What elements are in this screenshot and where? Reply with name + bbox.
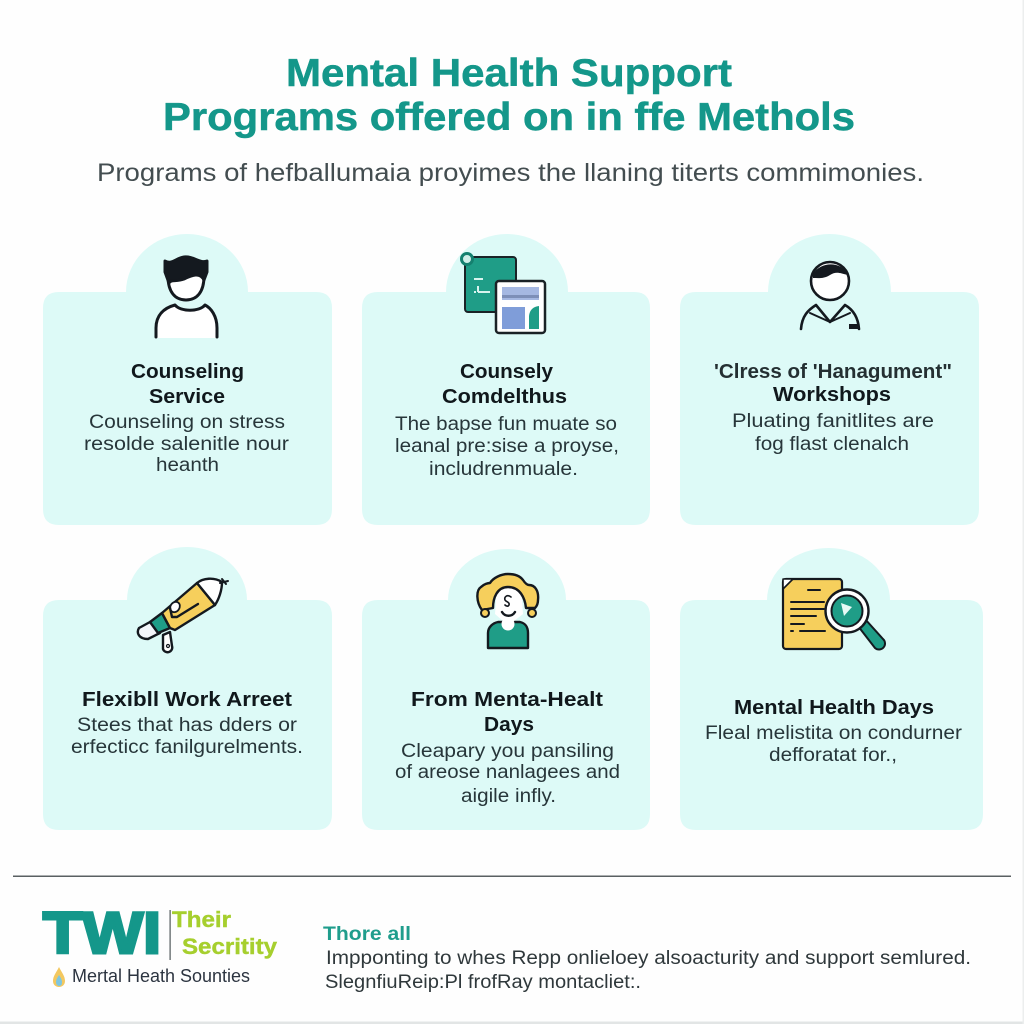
heading <box>714 361 952 406</box>
footer logo <box>43 901 278 987</box>
body text: Stees that has dders or <box>77 715 298 736</box>
body text: leanal pre:sise a proyse, <box>395 436 619 457</box>
title: Programs offered on in ffe Methols <box>163 96 855 139</box>
logo wordmark: Secritity <box>182 934 278 959</box>
body text: resolde salenitle nour <box>84 434 290 455</box>
footer note text <box>325 948 971 993</box>
body text: fog flast clenalch <box>755 434 909 455</box>
heading: Workshops <box>773 384 891 406</box>
icon: drop <box>53 967 65 987</box>
body text: of areose nanlagees and <box>395 762 620 783</box>
heading: Counsely <box>460 361 554 383</box>
body text: defforatat for., <box>769 745 897 766</box>
body text: Counseling on stress <box>89 412 285 433</box>
title: Mental Health Support <box>286 52 732 95</box>
logo tagline: Mertal Heath Sounties <box>72 966 250 986</box>
body text <box>71 715 303 758</box>
body text: The bapse fun muate so <box>395 414 617 435</box>
heading <box>411 689 603 736</box>
body text <box>732 411 934 455</box>
heading: 'Clress of 'Hanagument" <box>714 361 952 383</box>
panel: counseling service <box>43 234 332 525</box>
body text <box>395 414 619 480</box>
title <box>163 52 855 139</box>
body text <box>84 412 290 476</box>
icon: person with yellow hair <box>477 574 538 648</box>
logo mark: TWI: TWI <box>43 901 161 966</box>
subtitle: Programs of hefballumaia proyimes the llaning titerts commimonies. <box>97 159 924 187</box>
logo wordmark <box>172 907 278 959</box>
heading: Days <box>484 714 534 736</box>
body text <box>705 723 963 766</box>
heading: Comdelthus <box>442 386 567 408</box>
body text: Fleal melistita on condurner <box>705 723 963 744</box>
heading: From Menta-Healt <box>411 689 603 711</box>
panel: mental health days document <box>680 548 983 830</box>
panel: counsely comdelthus <box>362 234 650 525</box>
body text: heanth <box>156 455 219 476</box>
panel: flexible work <box>43 547 332 830</box>
icon: pen and hand <box>138 579 228 652</box>
heading: Flexibll Work Arreet <box>82 689 292 711</box>
logo wordmark: Their <box>172 907 231 932</box>
body text: aigile infly. <box>461 786 556 807</box>
heading: Service <box>149 386 225 408</box>
icon: green board and document <box>462 254 545 333</box>
panel: mental health days person <box>362 549 650 830</box>
icon: person in collared shirt <box>801 262 859 329</box>
footer note text: Impponting to whes Repp onlieloey alsoacturity and support semlured. <box>326 948 971 969</box>
body text: Pluating fanitlites are <box>732 411 934 432</box>
panel: stress management workshops <box>680 234 979 525</box>
body text: erfecticc fanilgurelments. <box>71 737 303 758</box>
heading <box>131 361 244 408</box>
heading <box>442 361 567 408</box>
heading: Mental Health Days <box>734 697 934 719</box>
icon: document and magnifier <box>783 579 885 650</box>
body text <box>395 741 620 807</box>
icon: person with dark hair <box>156 257 217 338</box>
heading: Counseling <box>131 361 244 383</box>
footer note text: SlegnfiuReip:Pl frofRay montacliet:. <box>325 972 641 993</box>
footer note heading: Thore all <box>323 924 411 945</box>
body text: includrenmuale. <box>429 459 578 480</box>
body text: Cleapary you pansiling <box>401 741 614 762</box>
